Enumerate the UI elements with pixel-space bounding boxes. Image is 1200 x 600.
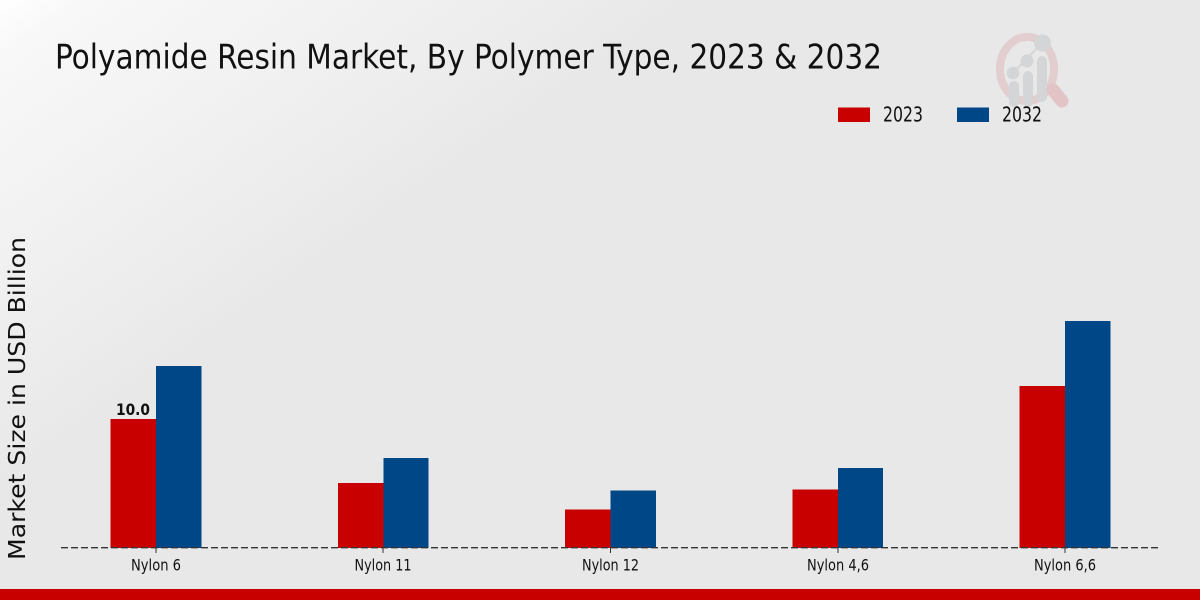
title: Polyamide Resin Market, By Polymer Type, 2023 & 2032 [55, 38, 882, 78]
group: Nylon 11 [338, 458, 428, 574]
icon: magnifier logo watermark [1000, 34, 1062, 107]
group: Nylon 6,6: Nylon 6,6 [1034, 556, 1096, 574]
legend item: 2023: 2023 [883, 102, 923, 126]
group: Nylon 12: Nylon 12 [582, 556, 639, 574]
legend [838, 102, 1042, 126]
y axis label: Market Size in USD Billion [3, 237, 31, 560]
group: Nylon 4,6 [792, 468, 883, 574]
group: Nylon 6: Nylon 6 [131, 556, 181, 574]
bottom red bar [0, 589, 1200, 600]
legend item: 2032: 2032 [1002, 102, 1042, 126]
group: Nylon 6,6 [1020, 321, 1110, 574]
legend item: 2023 [838, 102, 923, 126]
bar chart [61, 321, 1160, 574]
group: Nylon 11: Nylon 11 [354, 556, 412, 574]
group: Nylon 4,6: Nylon 4,6 [807, 556, 869, 574]
legend item: 2032 [957, 102, 1042, 126]
data label: 10.0: 10.0 [116, 400, 150, 419]
group: Nylon 6 [110, 366, 202, 574]
group: Nylon 12 [565, 490, 656, 574]
